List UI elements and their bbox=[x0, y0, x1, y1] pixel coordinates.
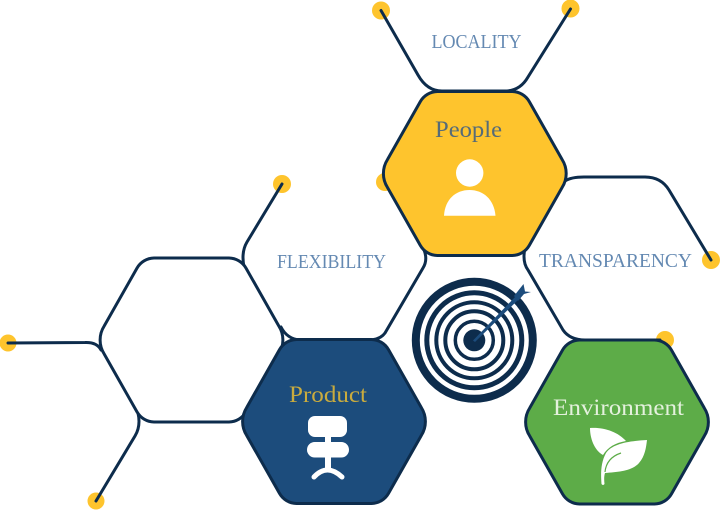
chart: target rings bbox=[416, 282, 533, 399]
label: FLEXIBILITY: FLEXIBILITY bbox=[277, 252, 386, 273]
icon: chair bbox=[307, 416, 349, 477]
panel: People hexagon bbox=[383, 92, 566, 256]
icon: person bbox=[444, 159, 496, 216]
arrow: dart bbox=[473, 284, 531, 342]
heading: People: People bbox=[435, 117, 502, 142]
panel: Product hexagon bbox=[243, 340, 425, 504]
panel: Environment hexagon bbox=[526, 340, 708, 504]
label: LOCALITY: LOCALITY bbox=[432, 32, 522, 53]
outline hexagon: left bbox=[100, 258, 283, 422]
heading: Environment: Environment bbox=[553, 395, 685, 420]
icon: leaves bbox=[590, 428, 647, 485]
label: TRANSPARENCY: TRANSPARENCY bbox=[539, 251, 692, 272]
heading: Product: Product bbox=[289, 382, 368, 407]
